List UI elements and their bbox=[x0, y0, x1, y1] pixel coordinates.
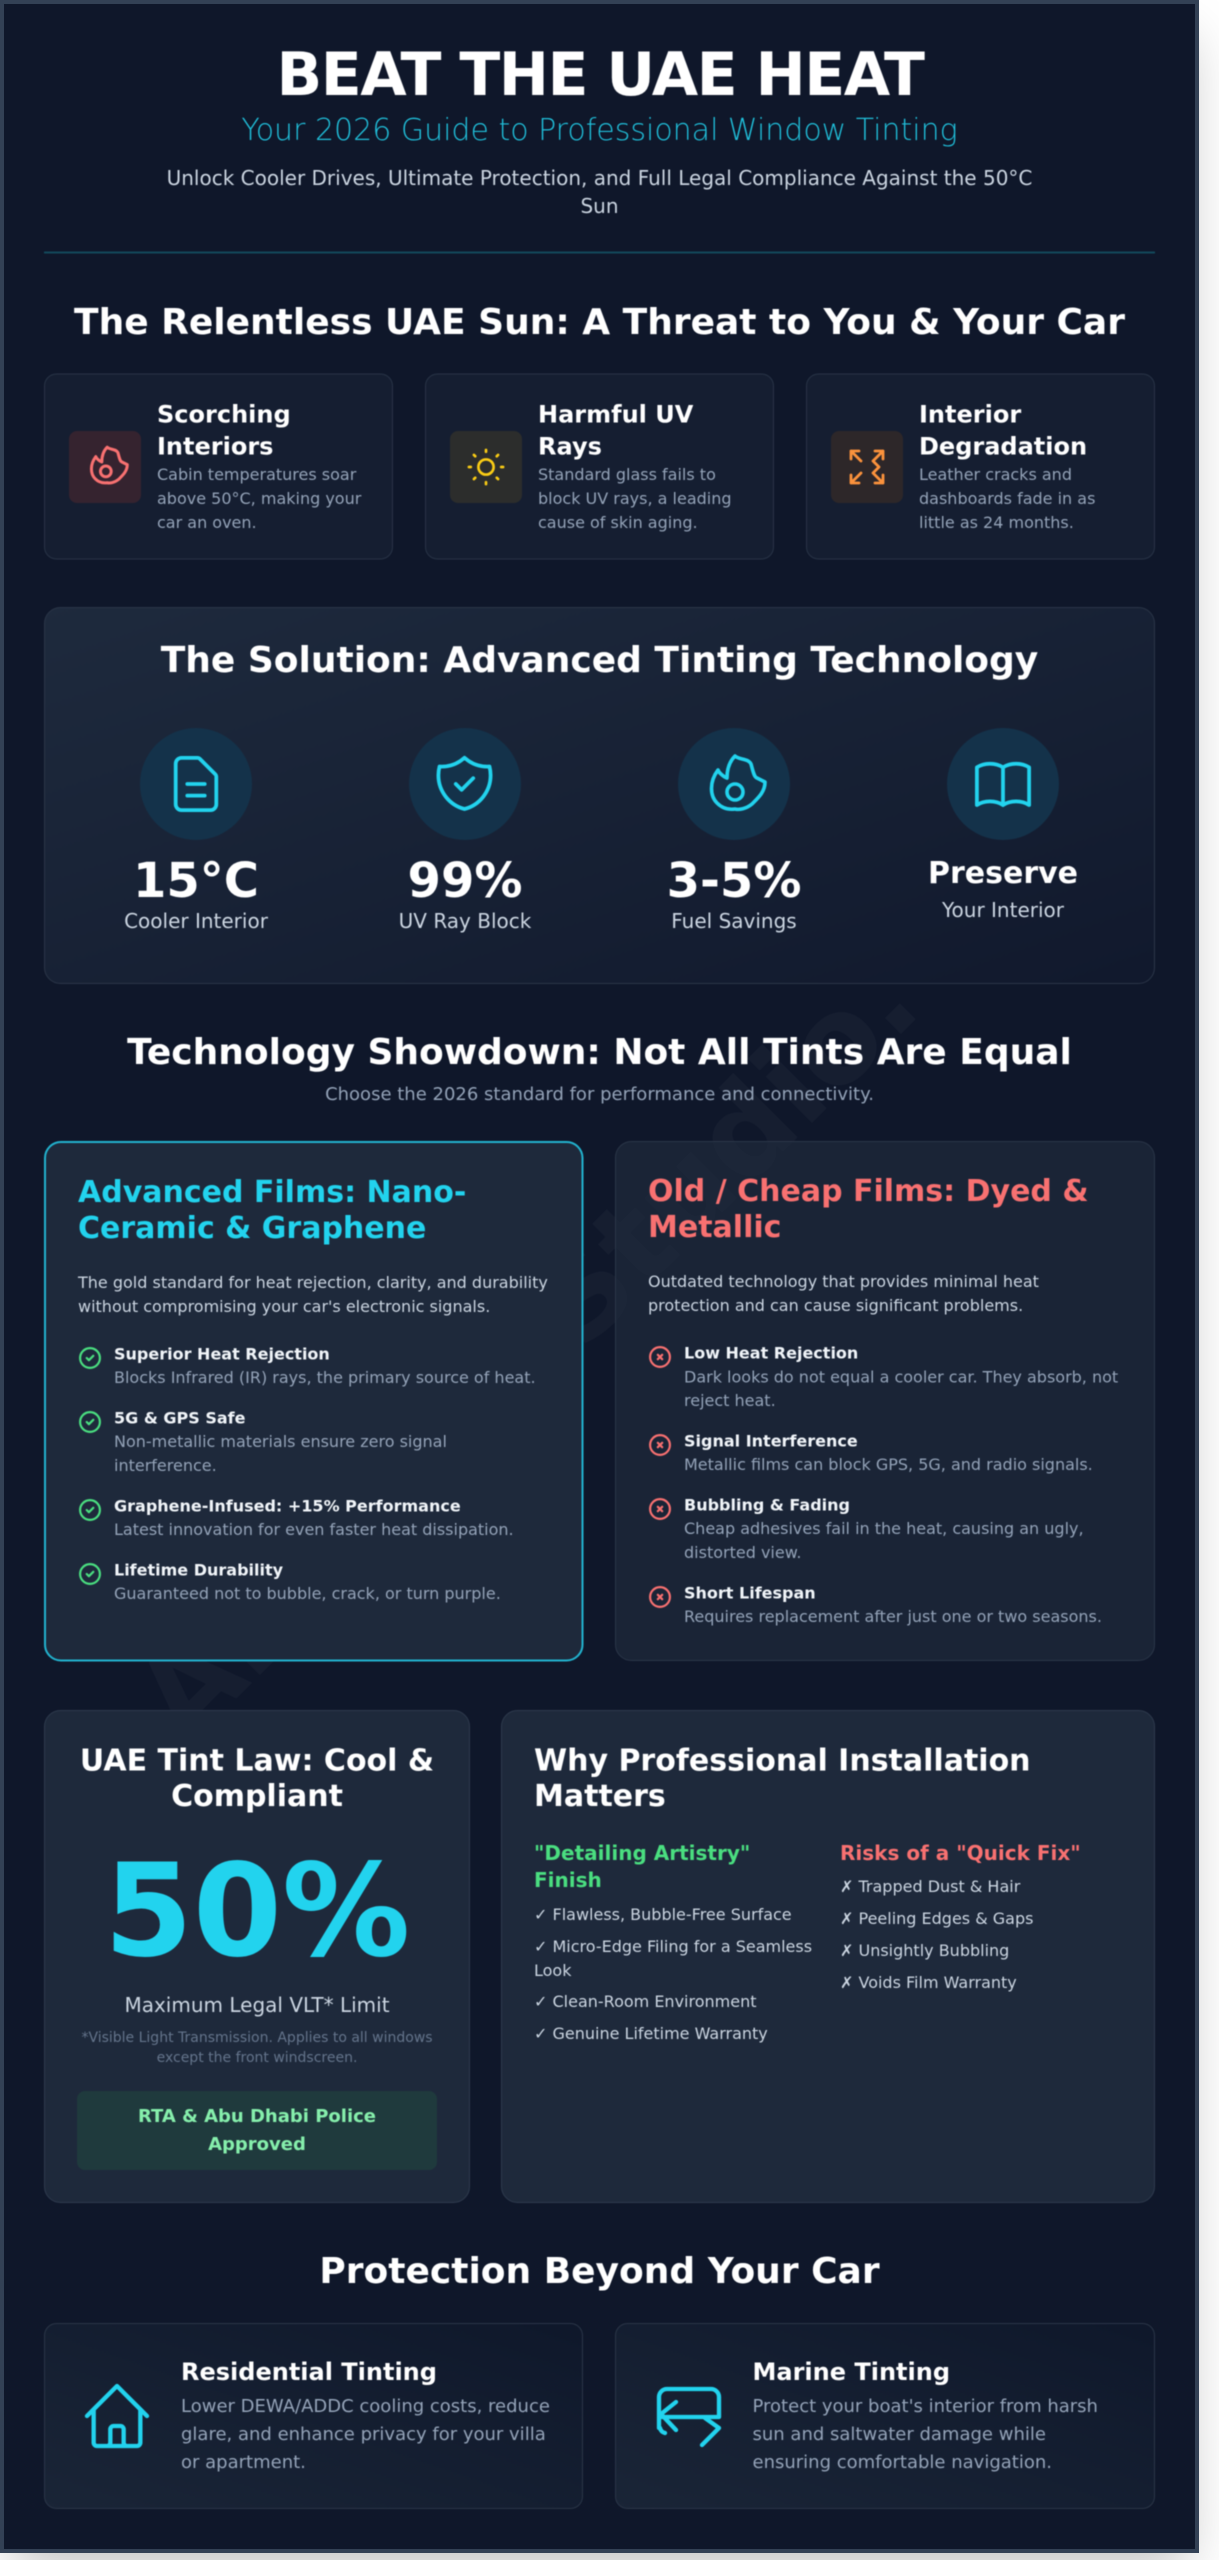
card text bbox=[181, 2358, 550, 2473]
panel: marine tinting bbox=[616, 2324, 1154, 2508]
card text bbox=[752, 2358, 1098, 2473]
card text: Lower DEWA/ADDC cooling costs, reduce bbox=[181, 2396, 550, 2417]
list item: heat rejection: Blocks Infrared (IR) rays, the primary source of heat. bbox=[114, 1368, 536, 1387]
card text: or apartment. bbox=[181, 2452, 306, 2473]
heading: advanced films: Advanced Films: Nano- bbox=[78, 1175, 466, 1210]
panel: professional installation bbox=[502, 1710, 1154, 2202]
header bbox=[44, 40, 1155, 254]
stat: cooler interior: 15°C bbox=[133, 853, 259, 909]
list item: graphene: Graphene-Infused: +15% Performance bbox=[114, 1496, 461, 1516]
list item: graphene bbox=[80, 1496, 514, 1539]
list item: short lifespan: Requires replacement after just one or two seasons. bbox=[684, 1607, 1102, 1626]
column: quick fix risks: ✗ Unsightly Bubbling bbox=[840, 1941, 1009, 1960]
column: detailing artistry finish bbox=[534, 1841, 812, 2043]
card text: above 50°C, making your bbox=[157, 489, 362, 508]
description: without compromising your car's electronic signals. bbox=[78, 1297, 490, 1316]
list item: bubbling: Cheap adhesives fail in the heat, causing an ugly, bbox=[684, 1519, 1084, 1538]
heading: old films: Metallic bbox=[648, 1210, 781, 1245]
approval badge bbox=[77, 2091, 437, 2170]
list item: heat rejection: Superior Heat Rejection bbox=[114, 1344, 330, 1364]
list item: signal interference: Signal Interference bbox=[684, 1432, 858, 1450]
icon: house bbox=[87, 2386, 147, 2446]
column: detailing artistry finish: ✓ Flawless, Bubble-Free Surface bbox=[534, 1905, 792, 1924]
stat: cooler interior bbox=[124, 728, 269, 933]
list item: 5g gps: 5G & GPS Safe bbox=[114, 1408, 246, 1428]
heading: installation: Matters bbox=[534, 1779, 666, 1814]
card text: Rays bbox=[538, 432, 602, 460]
icon: expanding arrows bbox=[831, 431, 903, 503]
panel: harmful uv rays bbox=[426, 374, 774, 559]
footnote bbox=[81, 2030, 433, 2066]
panel: interior degradation bbox=[806, 374, 1154, 559]
heading: tint law: UAE Tint Law: Cool & bbox=[80, 1744, 434, 1778]
stat: fuel savings: 3-5% bbox=[667, 853, 801, 909]
column: quick fix risks: Risks of a "Quick Fix" bbox=[840, 1841, 1081, 1865]
list item: durability: Lifetime Durability bbox=[114, 1560, 284, 1580]
column: quick fix risks: ✗ Trapped Dust & Hair bbox=[840, 1877, 1021, 1896]
heading: advanced films: Ceramic & Graphene bbox=[78, 1211, 426, 1246]
list item: short lifespan bbox=[650, 1584, 1102, 1626]
list item: bubbling bbox=[650, 1496, 1084, 1562]
column: quick fix risks: ✗ Peeling Edges & Gaps bbox=[840, 1909, 1033, 1928]
list item: bubbling: Bubbling & Fading bbox=[684, 1496, 850, 1514]
column: quick fix risks: ✗ Voids Film Warranty bbox=[840, 1973, 1017, 1992]
card text: Cabin temperatures soar bbox=[157, 465, 357, 484]
card text: glare, and enhance privacy for your villa bbox=[181, 2424, 546, 2445]
approval badge: RTA & Abu Dhabi Police bbox=[138, 2106, 376, 2127]
card text: Harmful UV bbox=[538, 400, 694, 428]
heading: technology showdown: Choose the 2026 standard for performance and connectivity. bbox=[325, 1084, 874, 1105]
title: BEAT THE UAE HEAT bbox=[277, 40, 925, 110]
description bbox=[77, 1273, 548, 1316]
card text: Standard glass fails to bbox=[538, 465, 716, 484]
heading: old films bbox=[648, 1174, 1088, 1245]
card text: little as 24 months. bbox=[919, 513, 1074, 532]
stat: preserve interior: Your Interior bbox=[941, 898, 1065, 922]
heading: relentless sun: The Relentless UAE Sun: A Threat to You & Your Car bbox=[74, 302, 1125, 343]
stat: uv ray block: UV Ray Block bbox=[399, 909, 532, 933]
stat: fuel savings bbox=[667, 728, 801, 933]
column: quick fix risks bbox=[840, 1841, 1081, 1992]
list item: low heat rejection: Dark looks do not equal a cooler car. They absorb, not bbox=[684, 1368, 1118, 1386]
footnote: *Visible Light Transmission. Applies to all windows bbox=[81, 2030, 433, 2046]
description: The gold standard for heat rejection, clarity, and durability bbox=[77, 1273, 548, 1292]
heading: tint law: Compliant bbox=[171, 1779, 343, 1814]
card text: Interior bbox=[919, 400, 1021, 428]
stat: uv ray block bbox=[399, 728, 532, 933]
list item: bubbling: distorted view. bbox=[684, 1543, 801, 1562]
panel: old films bbox=[616, 1142, 1154, 1660]
list item: short lifespan: Short Lifespan bbox=[684, 1584, 816, 1602]
intro text bbox=[167, 166, 1032, 218]
card text: dashboards fade in as bbox=[919, 489, 1095, 508]
heading: technology showdown: Technology Showdown: Not All Tints Are Equal bbox=[127, 1032, 1072, 1073]
icon: flame bbox=[69, 431, 141, 503]
stat: cooler interior: Cooler Interior bbox=[124, 909, 269, 933]
list item: 5g gps: interference. bbox=[114, 1456, 217, 1475]
column: detailing artistry finish: Look bbox=[534, 1961, 572, 1980]
heading: advanced films bbox=[78, 1175, 466, 1246]
column: detailing artistry finish: ✓ Clean-Room Environment bbox=[534, 1992, 756, 2011]
card text: cause of skin aging. bbox=[538, 513, 698, 532]
card text: Residential Tinting bbox=[181, 2358, 437, 2386]
card text: Marine Tinting bbox=[752, 2358, 950, 2386]
heading: technology showdown bbox=[127, 1032, 1072, 1105]
card text: Leather cracks and bbox=[919, 465, 1072, 484]
card text: ensuring comfortable navigation. bbox=[752, 2452, 1052, 2473]
heading: installation bbox=[534, 1744, 1031, 1814]
heading: installation: Why Professional Installation bbox=[534, 1744, 1031, 1778]
heading: protection beyond your car: Protection Beyond Your Car bbox=[319, 2251, 880, 2292]
panel: advanced films bbox=[45, 1142, 582, 1660]
subtitle: Your 2026 Guide to Professional Window Tinting bbox=[241, 113, 958, 148]
card text bbox=[919, 400, 1095, 532]
list item: 5g gps: Non-metallic materials ensure zero signal bbox=[114, 1432, 447, 1451]
stat: fuel savings: Fuel Savings bbox=[671, 909, 797, 933]
column: detailing artistry finish: Finish bbox=[534, 1868, 602, 1892]
icon: sun bbox=[450, 431, 522, 503]
list item: signal interference bbox=[650, 1432, 1093, 1474]
legal limit label: Maximum Legal VLT* Limit bbox=[124, 1993, 390, 2017]
footnote: except the front windscreen. bbox=[157, 2050, 357, 2066]
heading: tint law bbox=[80, 1744, 434, 1814]
description: protection and can cause significant problems. bbox=[648, 1296, 1023, 1315]
card text: car an oven. bbox=[157, 513, 257, 532]
card text bbox=[157, 400, 362, 532]
panel: the solution bbox=[44, 608, 1154, 984]
big number: 50% bbox=[104, 1837, 410, 1986]
card text: Protect your boat's interior from harsh bbox=[752, 2396, 1098, 2417]
card text: Interiors bbox=[157, 432, 273, 460]
stat: preserve interior: Preserve bbox=[928, 856, 1078, 891]
heading: old films: Old / Cheap Films: Dyed & bbox=[648, 1174, 1088, 1209]
panel: scorching interiors bbox=[44, 374, 392, 559]
stat: preserve interior bbox=[928, 728, 1078, 922]
list item: durability bbox=[80, 1560, 501, 1603]
card text: block UV rays, a leading bbox=[538, 489, 732, 508]
list item: low heat rejection: Low Heat Rejection bbox=[684, 1344, 858, 1362]
list item: signal interference: Metallic films can block GPS, 5G, and radio signals. bbox=[684, 1455, 1093, 1474]
heading: solution: The Solution: Advanced Tinting Technology bbox=[161, 640, 1038, 681]
approval badge: Approved bbox=[208, 2134, 306, 2155]
column: detailing artistry finish: ✓ Micro-Edge Filing for a Seamless bbox=[534, 1937, 812, 1956]
intro text: Sun bbox=[580, 194, 619, 218]
list item: 5g gps bbox=[80, 1408, 447, 1475]
description bbox=[648, 1272, 1039, 1315]
intro text: Unlock Cooler Drives, Ultimate Protection, and Full Legal Compliance Against the 50°C bbox=[167, 166, 1032, 190]
panel: residential tinting bbox=[44, 2324, 582, 2508]
icon: marine arrows bbox=[659, 2389, 719, 2445]
panel: uae tint law bbox=[44, 1710, 470, 2202]
card text bbox=[538, 400, 732, 532]
list item: heat rejection bbox=[80, 1344, 536, 1387]
list item: low heat rejection: reject heat. bbox=[684, 1391, 776, 1410]
list item: graphene: Latest innovation for even faster heat dissipation. bbox=[114, 1520, 514, 1539]
list item: low heat rejection bbox=[650, 1344, 1118, 1410]
list item: durability: Guaranteed not to bubble, crack, or turn purple. bbox=[114, 1584, 501, 1603]
card text: Degradation bbox=[919, 432, 1087, 460]
column: detailing artistry finish: "Detailing Artistry" bbox=[534, 1841, 750, 1865]
description: Outdated technology that provides minimal heat bbox=[648, 1272, 1039, 1291]
watermark: Artistry Studio. bbox=[109, 933, 945, 1768]
column: detailing artistry finish: ✓ Genuine Lifetime Warranty bbox=[534, 2024, 768, 2043]
card text: Scorching bbox=[157, 400, 291, 428]
stat: uv ray block: 99% bbox=[408, 853, 522, 909]
card text: sun and saltwater damage while bbox=[752, 2424, 1046, 2445]
